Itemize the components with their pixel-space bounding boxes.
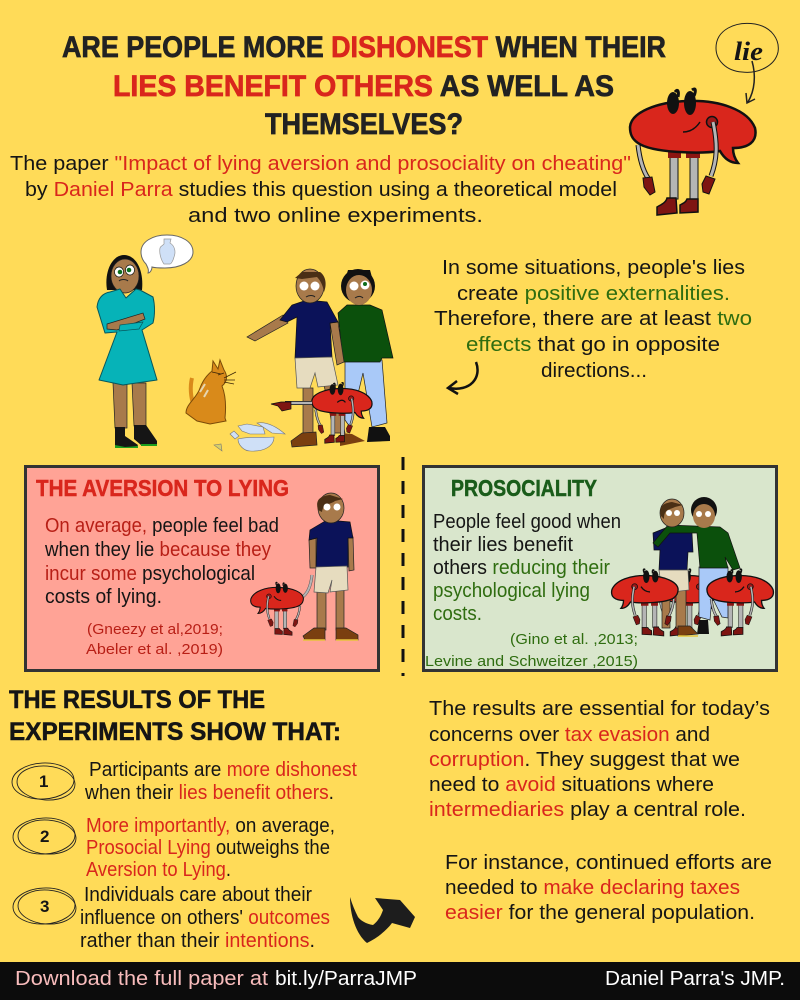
arrow: brush black	[350, 897, 415, 943]
panel text: prosociality: others reducing their	[433, 557, 610, 579]
mascot: red speech bubble robot	[630, 89, 756, 215]
result 2	[12, 815, 335, 881]
panel text: aversion: when they lie because they	[44, 539, 271, 561]
text: for instance: For instance, continued efforts are	[445, 852, 772, 874]
panel text: prosociality: psychological lying	[433, 580, 590, 602]
text: positive externalities	[434, 257, 752, 382]
panel text: prosociality	[433, 511, 621, 625]
icon: lie thought bubble with arrow: lie	[734, 37, 763, 66]
illustration: two people and three robots	[612, 497, 773, 636]
panel heading: prosociality: PROSOCIALITY	[451, 475, 597, 501]
arrow: curved black	[448, 362, 478, 394]
text: positive externalities: In some situations, people's lies	[442, 257, 745, 279]
citation: prosociality: Levine and Schweitzer ,2015)	[425, 653, 638, 670]
text: implications: need to avoid situations where	[429, 774, 714, 796]
citation: prosociality: (Gino et al. ,2013;	[510, 631, 638, 648]
result 1: 1	[39, 772, 48, 791]
panel text: aversion: On average, people feel bad	[45, 515, 279, 537]
panel text: aversion	[44, 515, 279, 608]
text: positive externalities: create positive externalities.	[457, 283, 730, 305]
title: THEMSELVES?	[265, 108, 463, 141]
text: positive externalities: directions...	[541, 360, 647, 382]
text: implications: The results are essential for today’s	[429, 698, 770, 720]
footer bar	[0, 962, 800, 1000]
text: positive externalities: effects that go in opposite	[466, 334, 720, 356]
panel text: prosociality: costs.	[433, 603, 482, 625]
heading: results: EXPERIMENTS SHOW THAT:	[9, 718, 341, 746]
panel text: aversion: incur some psychological	[45, 563, 255, 585]
footer bar: Download the full paper at	[15, 968, 268, 990]
title	[62, 31, 666, 141]
citation: aversion	[86, 621, 223, 658]
panel text: prosociality: their lies benefit	[433, 534, 573, 556]
text: implications: intermediaries play a central role.	[429, 799, 746, 821]
panel: prosociality	[424, 466, 776, 670]
panel text: aversion: costs of lying.	[45, 586, 162, 608]
intro text	[10, 153, 631, 227]
footer bar: bit.ly/ParraJMP	[275, 968, 417, 990]
text: for instance: easier for the general population.	[445, 902, 755, 924]
illustration: broken vase pieces	[214, 423, 285, 451]
citation: aversion: Abeler et al. ,2019)	[86, 641, 223, 658]
text: implications	[429, 698, 770, 821]
dashed divider	[402, 457, 404, 676]
result 3: influence on others' outcomes	[80, 907, 330, 929]
illustration: man with robot	[251, 493, 358, 640]
result 3	[12, 884, 330, 952]
illustration: two men pointing and sad robot	[247, 269, 393, 447]
result 3: Individuals care about their	[84, 884, 312, 906]
text: positive externalities: Therefore, there are at least two	[434, 308, 752, 330]
intro text: and two online experiments.	[188, 205, 483, 227]
panel text: prosociality: People feel good when	[433, 511, 621, 533]
illustration: woman with vase thought bubble	[97, 235, 193, 448]
illustration: orange cat	[186, 360, 236, 424]
result 2: Prosocial Lying outweighs the	[86, 837, 330, 859]
result 3: rather than their intentions.	[80, 930, 315, 952]
intro text: The paper "Impact of lying aversion and prosociality on cheating"	[10, 153, 631, 175]
text: for instance	[445, 852, 772, 924]
panel: the aversion to lying	[26, 466, 378, 670]
title: ARE PEOPLE MORE DISHONEST WHEN THEIR	[62, 31, 666, 64]
panel heading: aversion: THE AVERSION TO LYING	[36, 475, 289, 501]
text: implications: concerns over tax evasion and	[429, 724, 710, 746]
citation: aversion: (Gneezy et al,2019;	[87, 621, 223, 638]
footer bar: Daniel Parra's JMP.	[605, 968, 785, 990]
heading: results: THE RESULTS OF THE	[9, 686, 265, 714]
result 1: Participants are more dishonest	[89, 759, 357, 781]
result 1: when their lies benefit others.	[84, 782, 334, 804]
text: for instance: needed to make declaring taxes	[445, 877, 740, 899]
heading: results	[9, 686, 341, 746]
text: implications: corruption . They suggest that we	[429, 749, 740, 771]
icon: lie thought bubble with arrow	[716, 23, 778, 103]
result 2: More importantly, on average,	[86, 815, 335, 837]
intro text: by Daniel Parra studies this question using a theoretical model	[25, 179, 617, 201]
result 2: 2	[40, 827, 49, 846]
title: LIES BENEFIT OTHERS AS WELL AS	[113, 70, 614, 103]
citation: prosociality	[425, 631, 638, 670]
result 1	[11, 759, 357, 804]
result 3: 3	[40, 897, 49, 916]
result 2: Aversion to Lying.	[86, 859, 231, 881]
